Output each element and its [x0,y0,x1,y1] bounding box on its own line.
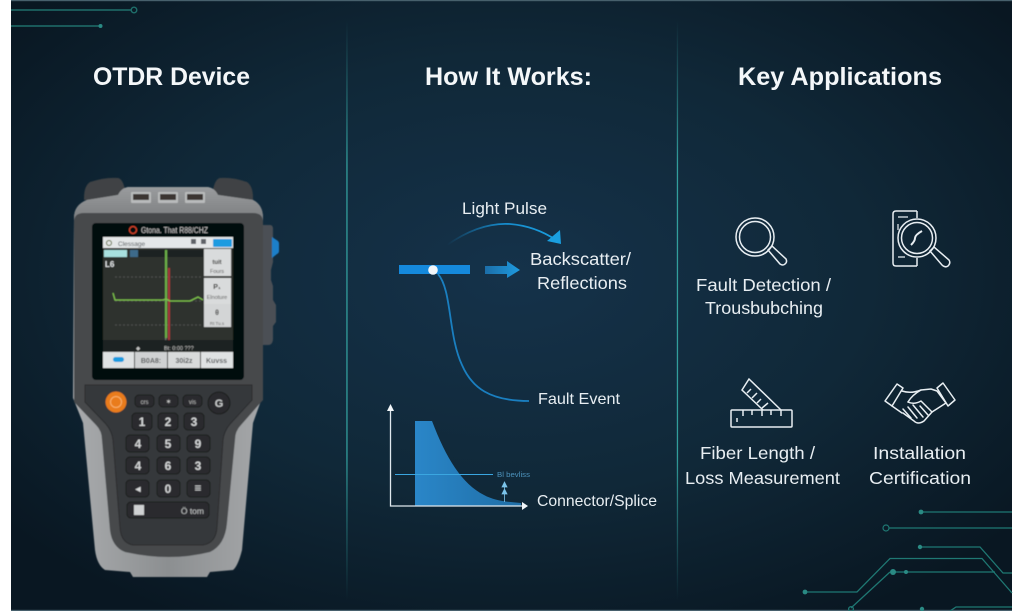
LCD green trace [113,293,203,301]
chart small arrow [502,482,507,502]
fault curve [438,274,529,401]
numeric keypad: 2 [165,415,172,429]
device outer shell [73,187,263,577]
application: fiber length [685,379,840,488]
application: fault detection [696,218,831,318]
numeric keypad: 1 [139,415,146,429]
icon: phone with magnifier [893,211,950,267]
LCD bottom buttons [103,352,233,368]
numeric keypad: 3 [195,459,202,473]
circuit traces: top left [11,7,137,28]
icon: handshake [885,383,955,423]
LCD bottom buttons: Kuvss [206,358,227,365]
device top cap [74,187,263,225]
heading: OTDR Device: OTDR Device [93,63,250,91]
diagram: how it works [387,200,657,510]
numeric keypad: 3 [191,415,198,429]
label: Connector/Splice: Connector/Splice [537,493,657,510]
function keys: ✶ [166,398,172,406]
brand line: Gtona. That R88/CHZ [141,225,208,235]
LCD side menu: θ [215,310,219,317]
label: fault detection: Fault Detection / [696,275,831,295]
divider left [346,20,348,600]
label: fiber length: Fiber Length / [700,443,815,463]
curved arrow: light pulse [447,224,561,245]
numeric keypad: ◂ [134,484,141,495]
chart small label: Bl bevliss [497,470,530,479]
LCD side menu: Rt Tu.s [210,321,225,326]
LCD sub bar: L6 [105,260,115,269]
label: installation certification: Certification [869,468,971,488]
numeric keypad [126,413,210,497]
label: Backscatter / Reflections [530,249,631,293]
device side buttons [262,225,279,345]
LCD side menu: Fours [210,269,224,275]
LCD side menu: P₁ [213,284,221,291]
device LCD screen [103,237,233,368]
icon: magnifier [736,218,787,265]
device top connectors [131,192,205,203]
fiber bar [399,265,470,275]
label: fault detection [696,275,831,318]
numeric keypad: 9 [195,437,202,451]
chart axes [390,410,523,506]
numeric keypad: 4 [135,459,142,473]
backscatter chart [387,404,530,510]
LCD side menu: Elnoture [207,295,227,301]
heading: How It Works: How It Works: [425,63,592,91]
LCD bottom buttons: B0A8: [141,358,161,365]
LCD side menu: tuit [212,260,222,266]
chart threshold [395,474,493,476]
LCD cursors [165,250,170,350]
OTDR device illustration [73,178,279,577]
numeric keypad: 6 [165,459,172,473]
LCD side menu [204,249,231,327]
label: Light Pulse: Light Pulse [462,200,547,218]
label: installation certification [869,443,971,488]
application: installation certification [869,383,971,488]
label: Backscatter / Reflections: Reflections [537,273,627,293]
LCD header bar: Clessage [118,241,145,248]
label: Backscatter / Reflections: Backscatter/ [530,249,631,269]
function keys [135,392,230,414]
straight arrow [485,261,520,278]
LCD readout strip [103,340,233,352]
circuit traces: bottom right [803,510,1012,611]
wide key [127,502,209,518]
icon: rulers [731,379,792,427]
device keypad panel [85,385,252,545]
label: installation certification: Installation [873,443,966,463]
numeric keypad: 5 [165,437,172,451]
device top bumpers [84,178,253,200]
device body [74,213,263,557]
LCD readout strip: ◆ [136,346,141,352]
numeric keypad: ≡ [194,481,202,495]
numeric keypad: 0 [165,482,172,496]
label: Fault Event: Fault Event [538,391,621,408]
LCD bottom buttons: 30i2z [175,358,193,365]
LCD grid lines [115,277,203,325]
wide key: Ö tom [181,506,204,516]
LCD readout strip: Bt: 0:00 ??? [164,346,194,352]
divider right [677,20,678,600]
function keys: vis [189,400,196,406]
device screen bezel [92,223,244,380]
function keys: crs [140,400,148,406]
orange power button [106,392,126,412]
chart area [415,421,521,506]
numeric keypad: 4 [135,437,142,451]
label: fiber length: Loss Measurement [685,468,840,488]
heading: Key Applications: Key Applications [738,63,942,91]
function keys: G [215,398,223,410]
label: fiber length [685,443,840,488]
label: fault detection: Trousbubching [705,298,823,318]
